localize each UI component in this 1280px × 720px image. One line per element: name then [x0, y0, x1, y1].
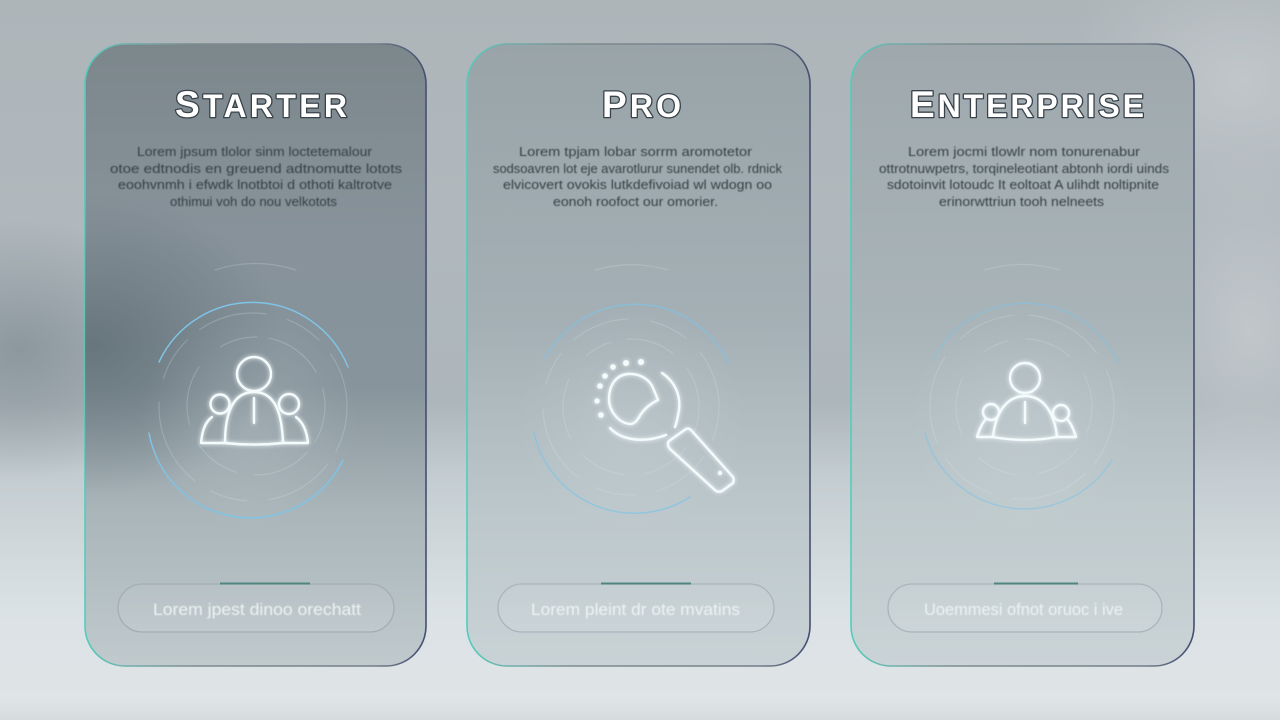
icon: magnifier, Pro	[594, 359, 734, 492]
text block: Enterprise description: ottrotnuwpetrs, torqineleotiant abtonh iordi uinds	[879, 162, 1169, 176]
button: Starter	[118, 584, 394, 632]
button: Pro: Lorem pleint dr ote mvatins	[531, 601, 740, 619]
card body: Enterprise	[851, 44, 1194, 666]
icon: team, Starter	[201, 357, 308, 444]
text block: Starter description: otoe edtnodis en greuend adtnomutte lotots	[110, 162, 402, 176]
text block: Pro description: eonoh roofoct our omorier.	[553, 195, 718, 209]
text block: Enterprise description: sdotoinvit lotoudc It eoltoat A ulihdt noltipnite	[887, 178, 1159, 192]
button: Starter: Lorem jpest dinoo orechatt	[153, 601, 361, 619]
icon: concentric rings, Enterprise	[907, 264, 1137, 535]
text block: Starter description	[110, 145, 402, 209]
heading: Pro: PRO	[602, 84, 681, 125]
text block: Starter description: Lorem jpsum tlolor sinm loctetemalour	[137, 145, 372, 159]
text block: Starter description: othimui voh do nou velkotots	[170, 195, 337, 209]
button: Pro	[498, 584, 774, 632]
icon: team, Enterprise	[977, 363, 1076, 440]
panel: Pro	[467, 44, 810, 666]
text block: Pro description: Lorem tpjam lobar sorrm aromotetor	[519, 145, 752, 159]
button: Enterprise: Uoemmesi ofnot oruoc i ive	[924, 601, 1123, 619]
card body: Starter	[84, 43, 427, 667]
panel: Enterprise	[851, 44, 1194, 666]
text block: Starter description: eoohvnmh i efwdk lnotbtoi d othoti kaltrotve	[118, 178, 392, 192]
icon: concentric rings, Pro	[516, 265, 746, 535]
text block: Enterprise description: Lorem jocmi tlowlr nom tonurenabur	[908, 145, 1140, 159]
text block: Pro description: elvicovert ovokis lutkdefivoiad wl wdogn oo	[503, 178, 772, 192]
text block: Pro description: sodsoavren lot eje avarotlurur sunendet olb. rdnick	[493, 162, 783, 176]
panel: Starter	[84, 43, 427, 667]
heading: Starter: STARTER	[175, 84, 347, 125]
text block: Enterprise description: erinorwttriun tooh nelneets	[939, 195, 1104, 209]
icon: concentric rings, Starter	[140, 264, 360, 530]
heading: Enterprise: ENTERPRISE	[910, 84, 1144, 125]
button: Enterprise	[888, 584, 1162, 632]
text block: Pro description	[493, 145, 783, 209]
card body: Pro	[467, 44, 810, 666]
text block: Enterprise description	[879, 145, 1169, 209]
